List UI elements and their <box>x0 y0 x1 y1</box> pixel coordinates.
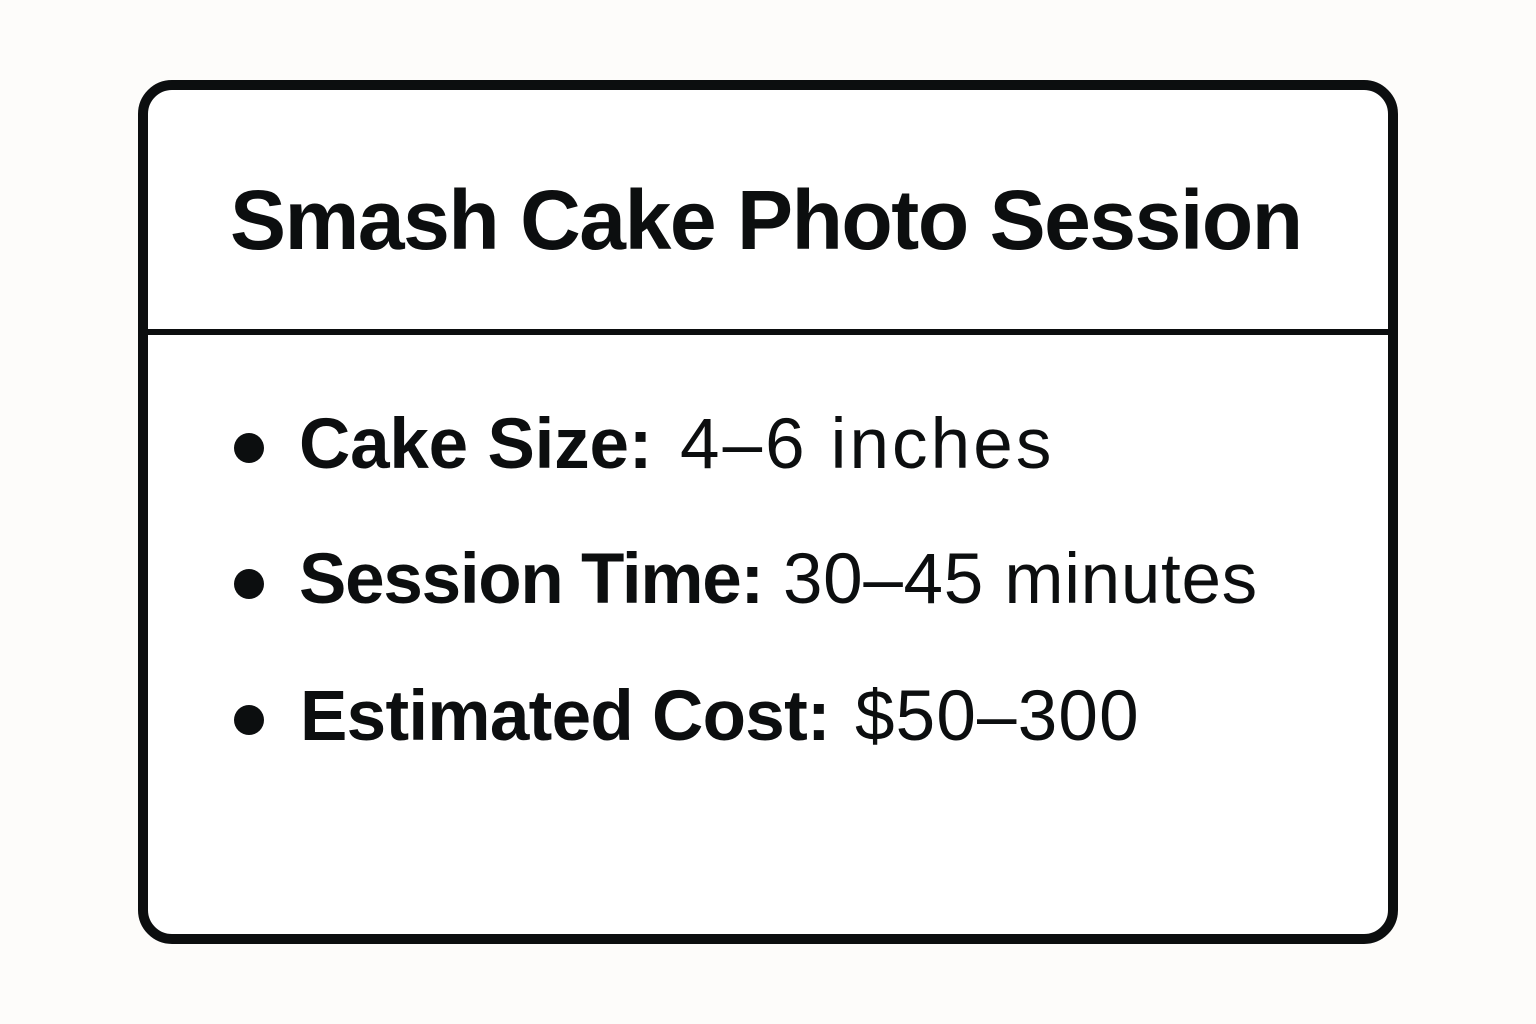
bullet row: cake size: Cake Size: <box>299 405 652 484</box>
bullet row: estimated cost: Estimated Cost: <box>300 677 830 756</box>
bullet row: session time: Session Time: <box>299 540 763 619</box>
bullet row: estimated cost <box>234 677 1140 756</box>
bullet row: session time <box>234 540 1258 619</box>
bullet row: session time: 30–45 minutes <box>783 540 1258 619</box>
panel: session card <box>138 80 1398 944</box>
divider <box>146 329 1390 335</box>
bullet row: cake size <box>234 405 1054 484</box>
bullet row: estimated cost: $50–300 <box>855 677 1140 756</box>
bullet row: cake size: 4–6 inches <box>680 405 1054 484</box>
title: Smash Cake Photo Session <box>230 173 1302 267</box>
